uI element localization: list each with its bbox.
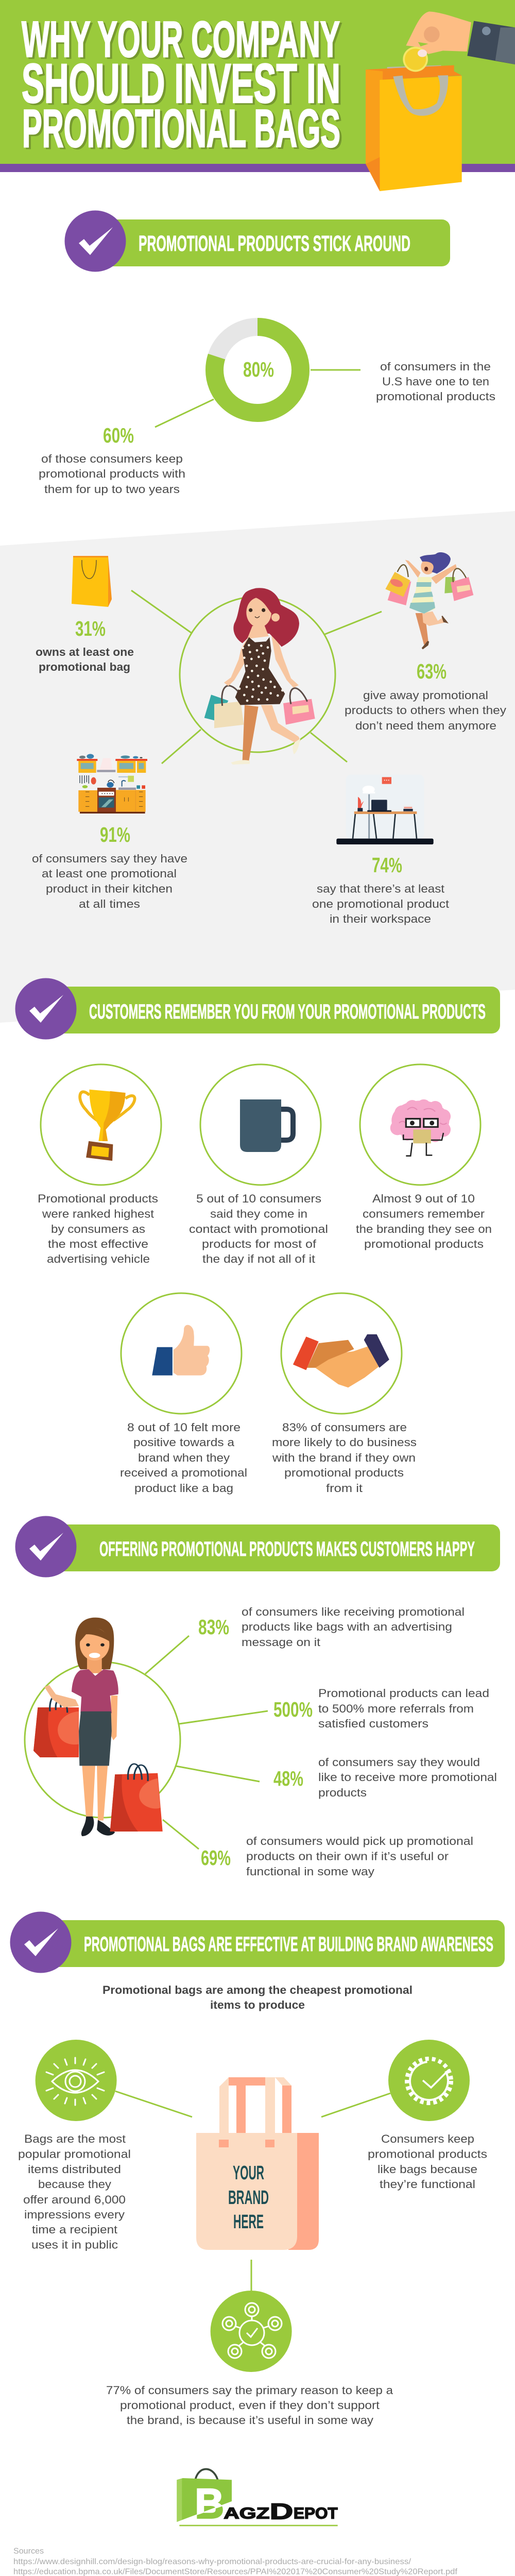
bag label: BRAND <box>228 2187 269 2209</box>
stat: 31% own a bag <box>36 556 134 673</box>
stat: 69%: 69% <box>201 1846 231 1870</box>
stat: 91% kitchen: 91% <box>100 823 130 846</box>
text: 5 out of 10 consumers <box>196 1192 321 1205</box>
stat: 91% kitchen: product in their kitchen <box>46 882 173 895</box>
icon: thumbs up <box>152 1325 210 1376</box>
stat: 83% <box>198 1605 465 1649</box>
donut chart: 80%: 80% <box>243 358 274 381</box>
stat: 48%: of consumers say they would <box>318 1756 480 1769</box>
stat: 500%: satisfied customers <box>318 1717 428 1730</box>
sources <box>13 2547 502 2576</box>
text: contact with promotional <box>189 1223 328 1235</box>
callout: 60% of consumers: them for up to two years <box>44 483 180 496</box>
text: bags most popular: impressions every <box>24 2208 125 2221</box>
text: Promotional products <box>38 1192 158 1205</box>
stat: 63% give away: 63% <box>417 659 447 683</box>
stat: 91% kitchen: at all times <box>79 897 140 910</box>
hub circle and connector lines <box>131 590 382 764</box>
icon: brain with glasses <box>390 1099 451 1156</box>
card: handshake <box>272 1293 417 1495</box>
text: advertising vehicle <box>47 1252 150 1265</box>
stat: 63% give away: products to others when they <box>345 704 506 717</box>
text: 77% of consumers: promotional product, even if they don’t support <box>120 2399 380 2412</box>
icon: mug <box>240 1099 293 1152</box>
text: consumers keep: like bags because <box>377 2163 477 2176</box>
text <box>38 1192 158 1265</box>
text: the most effective <box>48 1238 148 1250</box>
stat: 63% give away: give away promotional <box>363 689 488 702</box>
card: trophy <box>38 1064 161 1265</box>
stat: 69%: products on their own if it’s useful or <box>246 1850 449 1863</box>
stat: 63% give away: don’t need them anymore <box>355 719 496 732</box>
logo: BagzDepot: B <box>195 2480 224 2527</box>
illustration: woman with polka dot dress <box>204 588 315 765</box>
logo: BagzDepot: AGZ <box>224 2504 269 2522</box>
illustration: tote bag <box>196 2077 319 2250</box>
card: brain <box>356 1064 492 1250</box>
stat: 48%: like to receive more promotional <box>318 1771 497 1784</box>
text: bags most popular: Bags are the most <box>24 2132 126 2145</box>
illustration: kitchen <box>77 754 147 814</box>
section heading: stick around <box>65 210 450 272</box>
text: bags most popular: because they <box>38 2178 111 2191</box>
stat: 500%: to 500% more referrals from <box>318 1702 474 1715</box>
card: mug <box>189 1064 328 1265</box>
sources: https://education.bpma.co.uk/Files/DocumentStore/Resources/PPAI%202017%20Consumer%20Study%20Report.pdf <box>13 2568 458 2576</box>
callout: 60% of consumers: promotional products with <box>39 467 185 480</box>
panel: grey background <box>0 511 515 1023</box>
stat: 74% workspace: 74% <box>372 853 402 877</box>
stat: 91% kitchen: at least one promotional <box>42 867 177 880</box>
text: bags most popular: uses it in public <box>31 2238 118 2251</box>
text: promotional products <box>284 1466 404 1479</box>
callout: 60% of consumers: of those consumers keep <box>41 452 183 465</box>
connector lines to tote bag <box>115 2091 390 2291</box>
text: consumers keep: Consumers keep <box>381 2132 474 2145</box>
stat: 500% <box>273 1687 489 1730</box>
callout: 80% of consumers <box>311 360 495 403</box>
callout: 80% of consumers: U.S have one to ten <box>382 375 489 388</box>
stat: 83%: products like bags with an advertising <box>242 1620 452 1633</box>
text: bags most popular: time a recipient <box>32 2223 117 2236</box>
text: received a promotional <box>120 1466 247 1479</box>
stat: 83%: 83% <box>198 1615 229 1639</box>
icon: gear check in green circle <box>388 2040 470 2121</box>
text <box>120 1421 247 1495</box>
stat: 74% workspace: one promotional product <box>312 897 449 910</box>
illustration: woman with red bags <box>33 1618 163 1836</box>
bag label: HERE <box>233 2211 264 2233</box>
stat: 48%: products <box>318 1786 367 1799</box>
subheading: Promotional bags are among the cheapest promotional <box>102 1984 413 1996</box>
icon: eye in green circle <box>36 2040 117 2121</box>
text: positive towards a <box>133 1436 235 1449</box>
stat: 69%: of consumers would pick up promotional <box>246 1835 473 1848</box>
title <box>22 11 340 159</box>
text <box>356 1192 492 1250</box>
sources: https://www.designhill.com/design-blog/reasons-why-promotional-products-are-crucial-for-any-business/ <box>13 2557 411 2566</box>
icon: handshake <box>293 1334 389 1387</box>
text: products for most of <box>202 1238 317 1250</box>
text: were ranked highest <box>42 1207 154 1220</box>
text: bags most popular: popular promotional <box>18 2147 131 2161</box>
stat: 91% kitchen <box>32 754 187 910</box>
bag label <box>228 2162 269 2233</box>
text: 8 out of 10 felt more <box>127 1421 241 1434</box>
logo: BagzDepot: D <box>270 2499 293 2524</box>
callout: 80% of consumers: of consumers in the <box>380 360 491 373</box>
text: consumers keep: they’re functional <box>380 2178 475 2191</box>
text: by consumers as <box>51 1223 145 1235</box>
callout: 60% of consumers: 60% <box>103 423 134 447</box>
text: with the brand if they own <box>272 1451 416 1464</box>
text: 77% of consumers: 77% of consumers say the primary reason to keep a <box>106 2384 393 2397</box>
text: bags most popular: offer around 6,000 <box>23 2193 126 2206</box>
text: bags most popular <box>18 2132 131 2251</box>
header banner <box>0 0 515 191</box>
sources: Sources <box>13 2547 44 2555</box>
text: from it <box>326 1482 363 1495</box>
section heading: brand awareness <box>10 1911 505 1973</box>
donut chart: 80% <box>214 327 301 413</box>
illustration: jumping woman with bags <box>385 552 473 649</box>
stat: 500%: Promotional products can lead <box>318 1687 489 1700</box>
stat: 31% own a bag: 31% <box>75 617 106 640</box>
stat: 91% kitchen: of consumers say they have <box>32 852 187 865</box>
text: consumers keep: promotional products <box>368 2147 487 2161</box>
text: consumers keep <box>368 2132 487 2191</box>
text: consumers remember <box>363 1207 485 1220</box>
logo: BagzDepot: EPOT <box>294 2504 338 2522</box>
hub circle and connector lines <box>25 1636 268 1849</box>
text: 77% of consumers <box>106 2384 393 2427</box>
callout: 80% of consumers: promotional products <box>376 390 495 403</box>
text: product like a bag <box>134 1482 233 1495</box>
stat: 83%: of consumers like receiving promotional <box>242 1605 465 1618</box>
text: 83% of consumers are <box>282 1421 407 1434</box>
section heading: customers remember <box>15 978 500 1040</box>
text: Almost 9 out of 10 <box>372 1192 475 1205</box>
icon: hand dropping coin into yellow bag <box>366 11 515 191</box>
text: 77% of consumers: the brand, is because it’s useful in some way <box>127 2414 373 2427</box>
stat: 63% give away <box>345 552 506 732</box>
text: said they come in <box>210 1207 307 1220</box>
text: the day if not all of it <box>202 1252 315 1265</box>
stat: 48% <box>273 1756 497 1799</box>
stat: 31% own a bag: owns at least one <box>36 646 134 658</box>
bag label: YOUR <box>233 2162 264 2184</box>
stat: 48%: 48% <box>273 1767 303 1790</box>
subheading: items to produce <box>210 1998 305 2011</box>
text: brand when they <box>138 1451 230 1464</box>
text <box>189 1192 328 1265</box>
text: more likely to do business <box>272 1436 417 1449</box>
stat: 74% workspace: say that there’s at least <box>317 882 444 895</box>
stat: 69%: functional in some way <box>246 1865 374 1878</box>
card: thumbs up <box>120 1293 247 1495</box>
text: promotional products <box>364 1238 484 1250</box>
text <box>272 1421 417 1495</box>
stat: 74% workspace <box>312 774 449 925</box>
stat: 500%: 500% <box>273 1698 313 1721</box>
logo: BagzDepot <box>177 2469 338 2527</box>
text: the branding they see on <box>356 1223 492 1235</box>
callout: 60% of consumers <box>39 399 214 496</box>
icon: yellow shopping bag <box>72 556 112 607</box>
icon: network in green circle <box>211 2291 292 2372</box>
stat: 69% <box>201 1835 473 1878</box>
illustration: office desk <box>336 774 434 844</box>
stat: 83%: message on it <box>242 1636 320 1649</box>
subheading <box>102 1984 413 2011</box>
stat: 74% workspace: in their workspace <box>330 912 431 925</box>
icon: trophy <box>80 1090 135 1161</box>
logo: BagzDepot: B <box>195 2480 224 2527</box>
stat: 31% own a bag: promotional bag <box>39 660 130 673</box>
text: bags most popular: items distributed <box>28 2163 121 2176</box>
section heading: customers happy <box>15 1516 500 1578</box>
